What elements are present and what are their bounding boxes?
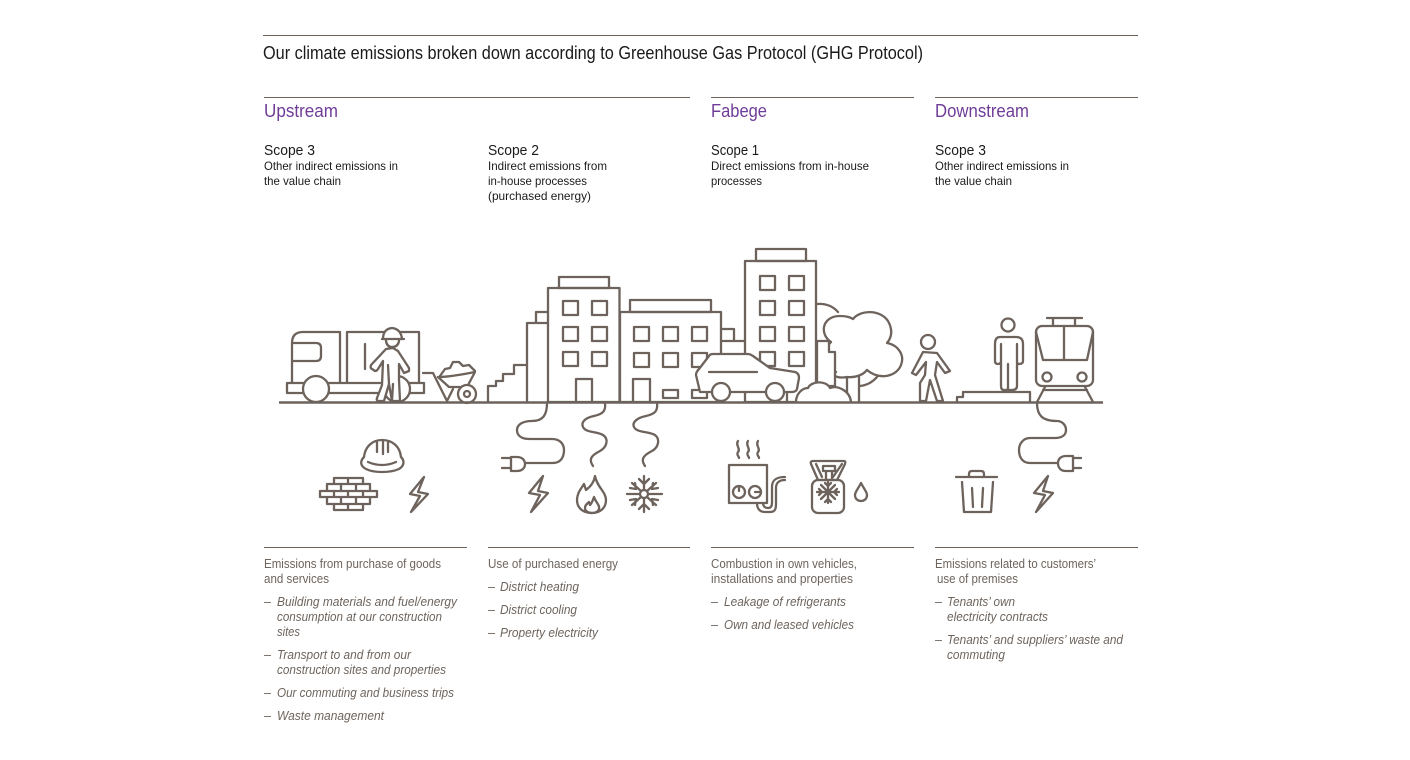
text block: upstream scope 3: the value chain — [264, 174, 341, 188]
text block: downstream emissions list: – — [934, 633, 943, 647]
text block: upstream emissions list: construction sites and properties — [277, 663, 446, 677]
icon: refrigerant bottle — [811, 461, 845, 513]
text block: purchased energy list: District heating — [500, 580, 579, 594]
text block: combustion list — [710, 557, 857, 632]
illustration: wheelbarrow — [423, 362, 476, 403]
icon: bricks — [320, 478, 377, 510]
text block: upstream emissions list: Emissions from purchase of goods — [264, 557, 441, 571]
illustration: tram — [1036, 318, 1093, 402]
text block: scope 2: Scope 2 — [488, 142, 539, 159]
text block: downstream emissions list: electricity contracts — [947, 610, 1048, 624]
icon: power cable and plug scope 2 — [502, 403, 564, 471]
ground line — [279, 401, 1103, 404]
text block: scope 1: Scope 1 — [711, 142, 759, 159]
icon: heat squiggle — [582, 403, 607, 466]
icon: hard hat — [361, 440, 403, 472]
text block: scope 2: Indirect emissions from — [488, 159, 607, 173]
text block: purchased energy list: Use of purchased energy — [488, 557, 619, 571]
text block: scope 1: Direct emissions from in-house — [711, 159, 869, 173]
text block: upstream emissions list: – — [263, 709, 272, 723]
text block: upstream emissions list: Our commuting and business trips — [277, 686, 454, 700]
text block: downstream scope 3: the value chain — [935, 174, 1012, 188]
text block: upstream emissions list: Building materials and fuel/energy — [277, 595, 458, 609]
heading: Upstream: Upstream — [264, 101, 338, 121]
icon: lightning bolt upstream — [410, 477, 428, 512]
illustration: stairs — [488, 365, 527, 402]
illustration: car — [696, 354, 799, 402]
icon: cooling squiggle — [634, 403, 658, 466]
icon: power cable and plug downstream — [1019, 403, 1081, 471]
text block: upstream emissions list: sites — [277, 625, 300, 639]
illustration: platform and standing person — [957, 318, 1030, 402]
icon: snowflake — [627, 476, 662, 512]
title: Our climate emissions broken down according to Greenhouse Gas Protocol (GHG Protocol) — [263, 42, 923, 63]
text block: downstream scope 3: Scope 3 — [935, 142, 986, 159]
text block: combustion list: Own and leased vehicles — [724, 618, 854, 632]
illustration: construction worker — [371, 328, 409, 401]
illustration: truck — [287, 332, 424, 402]
text block: downstream emissions list — [934, 557, 1124, 662]
icon: boiler with steam and pipes — [729, 441, 785, 512]
icon: flame — [577, 476, 606, 513]
text block: purchased energy list — [487, 557, 619, 640]
text block: purchased energy list: Property electricity — [500, 626, 599, 640]
text block: upstream emissions list: Waste management — [277, 709, 384, 723]
text block: scope 2: in-house processes — [488, 174, 587, 188]
text block: downstream emissions list: – — [934, 595, 943, 609]
text block: downstream emissions list: commuting — [947, 648, 1005, 662]
text block: downstream scope 3 — [935, 142, 1069, 188]
text block: combustion list: – — [710, 618, 719, 632]
illustration: buildings — [527, 249, 816, 402]
text block: scope 1 — [711, 142, 869, 188]
text block: upstream emissions list: and services — [264, 572, 329, 586]
text block: combustion list: Combustion in own vehicles, — [711, 557, 857, 571]
text block: purchased energy list: – — [487, 580, 496, 594]
text block: downstream emissions list: Tenants’ own — [947, 595, 1015, 609]
text block: upstream emissions list: Transport to and from our — [277, 648, 412, 662]
text block: scope 2: (purchased energy) — [488, 189, 591, 203]
text block: upstream scope 3: Scope 3 — [264, 142, 315, 159]
text block: upstream scope 3: Other indirect emissions in — [264, 159, 398, 173]
text block: downstream scope 3: Other indirect emissions in — [935, 159, 1069, 173]
text block: combustion list: Leakage of refrigerants — [724, 595, 846, 609]
text block: purchased energy list: – — [487, 626, 496, 640]
icon: lightning bolt scope 2 — [529, 476, 548, 512]
illustration: walking person — [912, 335, 950, 401]
text block: upstream emissions list — [263, 557, 458, 723]
icon: droplet — [855, 483, 867, 501]
text block: purchased energy list: District cooling — [500, 603, 577, 617]
heading: Fabege: Fabege — [711, 101, 767, 121]
text block: upstream emissions list: – — [263, 686, 272, 700]
text block: scope 2 — [488, 142, 607, 203]
text block: combustion list: installations and properties — [711, 572, 853, 586]
text block: upstream emissions list: – — [263, 648, 272, 662]
icon: waste bin — [956, 471, 997, 512]
icon: lightning bolt downstream — [1034, 476, 1053, 512]
text block: scope 1: processes — [711, 174, 762, 188]
text block: purchased energy list: – — [487, 603, 496, 617]
text block: upstream emissions list: consumption at our construction — [277, 610, 442, 624]
illustration: trees — [796, 304, 902, 402]
text block: downstream emissions list: Tenants’ and suppliers’ waste and — [947, 633, 1124, 647]
heading: Downstream: Downstream — [935, 101, 1029, 121]
text block: downstream emissions list: Emissions related to customers’ — [935, 557, 1096, 571]
text block: upstream scope 3 — [264, 142, 398, 188]
text block: upstream emissions list: – — [263, 595, 272, 609]
text block: combustion list: – — [710, 595, 719, 609]
text block: downstream emissions list: use of premises — [937, 572, 1018, 586]
